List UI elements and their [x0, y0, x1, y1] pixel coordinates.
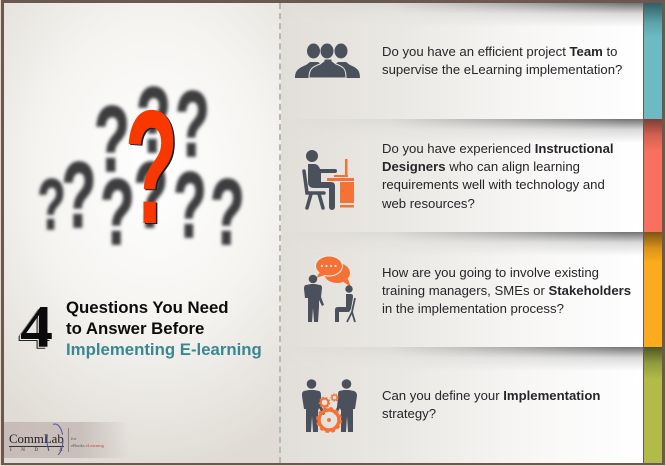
blurred question marks [37, 70, 245, 265]
blurred question marks: ? [136, 70, 171, 173]
blurred question marks: ? [62, 145, 96, 248]
text: question 3: training managers, SMEs or Stakeholders [382, 283, 631, 298]
text: question 3: How are you going to involve existing [382, 265, 599, 280]
text: question 4 [382, 388, 600, 421]
strip: green [644, 347, 662, 463]
logo tagline: eBooks eLearning [71, 443, 104, 448]
logo tagline: for [71, 436, 76, 441]
icon: designer at desk [302, 150, 354, 210]
text: question 1 [382, 44, 622, 77]
text: question 4: strategy? [382, 406, 436, 421]
text: question 2: Designers who can align learning [382, 159, 580, 174]
strip: coral [644, 119, 662, 232]
text: question 3 [382, 265, 631, 316]
logo [4, 422, 130, 458]
text: question 1: Do you have an efficient project Team to [382, 44, 617, 59]
dashed divider [279, 3, 281, 463]
panel: designers [281, 119, 643, 232]
title line 1: Questions You Need [66, 298, 229, 317]
blurred question marks: ? [174, 154, 206, 258]
icon: conversation [304, 256, 356, 322]
logo subtext: INDIA [10, 448, 72, 453]
text: question 2: Do you have experienced Instructional [382, 141, 614, 156]
panel: stakeholders [281, 232, 643, 347]
left panel background [4, 3, 282, 463]
numeral 4: 4 [20, 294, 53, 360]
icon: strategy gears [302, 379, 357, 433]
blurred question marks: ? [134, 145, 168, 248]
logo swirl [46, 424, 64, 456]
question marks illustration [36, 70, 245, 260]
logo tagline [68, 428, 104, 452]
strip: orange [644, 232, 662, 347]
title line 3: Implementing E-learning [66, 340, 262, 359]
strip: teal [644, 3, 662, 119]
red question mark: ? [126, 77, 180, 259]
text: question 2 [382, 141, 614, 211]
blurred question marks: ? [37, 165, 66, 244]
logo text: CommLab [9, 432, 64, 446]
panel: team [281, 3, 643, 119]
red question mark: ? [125, 76, 178, 258]
icon: team [295, 44, 360, 78]
panel: strategy [281, 347, 643, 463]
text: question 2: requirements well with technology and [382, 177, 605, 192]
text: question 1: supervise the eLearning implementation? [382, 62, 622, 77]
text: question 3: in the implementation process? [382, 301, 564, 316]
text: question 2: web resources? [382, 196, 475, 211]
blurred question marks: ? [175, 74, 210, 177]
title [66, 298, 262, 359]
blurred question marks: ? [94, 88, 130, 191]
text: question 4: Can you define your Implementation [382, 388, 600, 403]
title line 2: to Answer Before [66, 319, 204, 338]
